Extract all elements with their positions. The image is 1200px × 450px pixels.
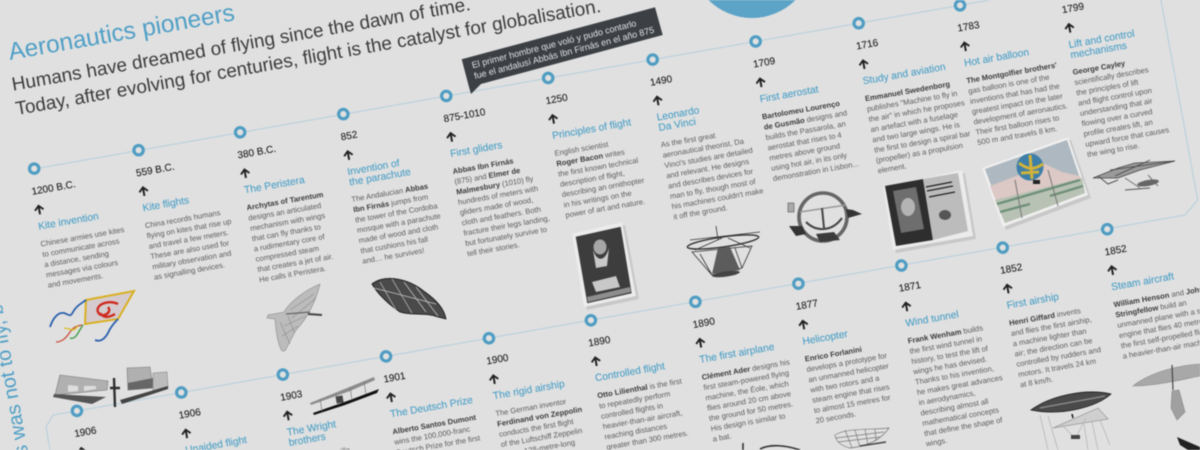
entry: Steam aircraft [1103, 230, 1200, 361]
entry: Invention of the parachute: and… he survives! [362, 246, 425, 266]
entry: Principles of flight: 1250 [545, 92, 569, 107]
entry: Lift and control mechanisms: and flight control upon [1077, 86, 1152, 108]
entry: First airship: and flies the first airship, [1010, 315, 1092, 338]
entry: Controlled flight: Otto Lilienthal is the first [597, 376, 683, 400]
entry: The first airplane: a bat. [712, 431, 732, 444]
entry: The Peristera: 380 B.C. [237, 144, 277, 162]
icon: Giffard airship [1031, 392, 1111, 450]
entry: Leonardo Da Vinci: Da Vinci [658, 117, 697, 134]
entry: Helicopter: steam engine that rises [811, 382, 890, 405]
entry: Leonardo Da Vinci: Leonardo [656, 105, 701, 124]
entry: The Peristera: that creates a jet of air. [257, 252, 334, 274]
entry: Leonardo Da Vinci: and relevant. He designs [665, 157, 750, 180]
entry: Hot air balloon: greatest impact on the later [971, 91, 1064, 116]
entry: Kite flights: China records humans [144, 208, 221, 230]
entry: Controlled flight: Controlled flight [594, 361, 666, 384]
entry: Hot air balloon: development of aeronautics. [973, 101, 1068, 127]
entry: Principles of flight: describing an ornithopter [561, 176, 645, 199]
entry: First airship: at 8 km/h. [1019, 375, 1054, 389]
entry: Kite flights [135, 154, 239, 282]
entry: Kite flights: 559 B.C. [135, 162, 175, 179]
entry: Helicopter: an unmanned helicopter [808, 361, 890, 384]
entry: Principles of flight: description of flight, [559, 169, 625, 189]
entry: Kite flights: as signalling devices. [153, 260, 226, 282]
entry: Lift and control mechanisms: Lift and control [1068, 29, 1136, 51]
entry: Controlled flight: controlled flights in [600, 401, 664, 421]
entry: Lift and control mechanisms: the principles of lift [1076, 78, 1140, 97]
entry: First gliders: fracture their legs landing, [463, 214, 550, 238]
entry: Principles of flight: Principles of flight [551, 117, 632, 142]
entry: Controlled flight: reaching distances [604, 421, 668, 441]
entry: The Peristera: that can fly thanks to [251, 222, 321, 243]
entry: Helicopter [794, 288, 897, 426]
entry: Kite invention [30, 172, 132, 290]
entry: First gliders: but fortunately survive to [465, 225, 548, 248]
entry: Wind tunnel: describing almost all [920, 397, 989, 418]
entry: Principles of flight: Roger Bacon writes [556, 147, 626, 168]
entry: The rigid airship: The German inventor [495, 397, 567, 418]
entry: Kite invention: to communicate across [42, 236, 120, 259]
icon: glider wing [372, 278, 446, 319]
entry: The first airplane: flies around 20 cm above [706, 389, 792, 413]
entry: Wind tunnel [897, 269, 1013, 449]
entry: Hot air balloon: 500 m and travels 8 km. [977, 124, 1058, 147]
entry: First airship: a machine lighter than [1012, 326, 1087, 348]
entry: Helicopter: Helicopter [802, 329, 849, 348]
entry: Principles of flight [544, 82, 649, 220]
entry: Wind tunnel: the first wind tunnel in [909, 334, 983, 356]
entry: Invention of the parachute: that cushions his fall [360, 235, 429, 255]
entry: Controlled flight: 1890 [588, 335, 612, 349]
entry: Invention of the parachute: mosque with a parachute [356, 211, 441, 235]
entry: Invention of the parachute: 852 [340, 130, 359, 143]
entry: Study and aviation: the first to design a spiral bar [873, 129, 971, 155]
entry: First gliders: gliders made of wood, [459, 195, 534, 217]
entry: The Deutsch Prize: 1901 [383, 371, 407, 386]
entry: Study and aviation: Study and aviation [862, 62, 946, 87]
entry: The rigid airship: Ferdinand von Zeppolin [496, 405, 583, 429]
entry: First aerostat: Bartolomeu Lourenço [761, 99, 841, 121]
entry: First aerostat: metres above ground [769, 141, 841, 163]
picture: Montgolfier balloon [982, 137, 1091, 230]
entry: Study and aviation: an artefact with a fuselage [870, 110, 959, 134]
entry: Kite invention: Chinese armies use kites [40, 225, 125, 249]
entry: The Peristera: mechanism with wings [249, 211, 326, 233]
entry: First airship: First airship [1006, 292, 1060, 312]
entry: Study and aviation: and two large wings. He is [872, 120, 961, 144]
entry: Study and aviation: Emmanuel Swedenborg [864, 79, 951, 103]
title: Aeronautics pioneers [6, 0, 237, 66]
entry: The Peristera: compressed steam [255, 244, 320, 264]
entry: Kite flights: Kite flights [142, 195, 190, 214]
entry: Invention of the parachute: the parachute [348, 167, 412, 189]
icon: Forlanini helicopter [835, 428, 889, 448]
icon: Da Vinci helicopter [687, 226, 760, 279]
entry: The Deutsch Prize [381, 360, 482, 450]
entry: Wind tunnel: Frank Wenham builds [907, 323, 984, 345]
entry: Hot air balloon: The Montgolfier brothers' [966, 61, 1058, 85]
entry: First aerostat: First aerostat [759, 84, 820, 105]
entry: The rigid airship: The rigid airship [492, 379, 566, 402]
entry: The rigid airship: 1900 [486, 353, 510, 367]
entry: The first airplane [691, 305, 801, 444]
entry: Lift and control mechanisms: upward force that causes [1085, 125, 1170, 149]
entry: Hot air balloon [956, 7, 1072, 147]
entry: First aerostat: builds the Passarola, an [765, 119, 846, 142]
entry: Wind tunnel: history, to test the lift of [911, 344, 989, 366]
entry: First gliders: cloth and feathers. Both [461, 205, 542, 227]
entry: First airship: Henri Giffard invents [1008, 306, 1082, 328]
entry: 1906 first [73, 425, 101, 450]
entry: Helicopter: 1877 [795, 298, 819, 313]
entry: Lift and control mechanisms: the wing to rise. [1086, 141, 1140, 159]
entry: Helicopter: Enrico Forlanini [804, 345, 863, 364]
entry: Kite invention: Kite invention [37, 211, 100, 233]
entry: Principles of flight: the first known technical [557, 156, 639, 179]
icon: Passarola aerostat [788, 193, 862, 242]
entry: Controlled flight: heavier-than-air aircraft, [602, 408, 683, 431]
decorative circle [690, 0, 814, 18]
entry: First aerostat [752, 45, 859, 183]
entry: Invention of the parachute: made of wood and cloth [358, 222, 439, 245]
entry: Helicopter: 20 seconds. [815, 409, 857, 425]
entry: The Wright brothers: 1903 [279, 389, 304, 404]
entry: Lift and control mechanisms: understanding that air [1079, 96, 1154, 118]
entry: Wind tunnel: mathematical concepts [922, 405, 1000, 428]
entry: Kite flights: military observation and [151, 249, 232, 271]
entry: The first airplane: His design is similar to [710, 411, 786, 433]
entry: Study and aviation [855, 25, 975, 175]
entry: The Peristera: Archytas of Tarentum [246, 190, 324, 212]
entry: Lift and control mechanisms: profile creates lift, an [1083, 117, 1153, 139]
entry: The Peristera: The Peristera [243, 175, 306, 196]
entry: Lift and control mechanisms: scientifically describes [1074, 65, 1149, 87]
entry: Wind tunnel: 1871 [898, 280, 922, 295]
entry: Lift and control mechanisms: mechanisms [1070, 41, 1128, 61]
entry: The Peristera: designs an articulated [248, 201, 322, 223]
entry: Leonardo Da Vinci: man to fly, though most of [669, 177, 757, 201]
icon: peristera [267, 284, 322, 351]
entry: First airship: motors. It travels 24 km [1017, 357, 1097, 379]
entry: Helicopter: develops a prototype for [806, 351, 888, 374]
entry: Wind tunnel: wings. [924, 436, 948, 449]
entry: Leonardo Da Vinci [649, 62, 766, 222]
entry: Lift and control mechanisms: 1799 [1061, 1, 1085, 16]
entry: First gliders: 875-1010 [443, 107, 487, 125]
entry: Invention of the parachute: the tower of the Cordoba [354, 201, 439, 225]
entry: Study and aviation: 1716 [855, 38, 880, 52]
entry: Wind tunnel: that define the shape of [923, 415, 1004, 438]
entry: Wind tunnel: in aerodynamics, [918, 388, 976, 407]
entry: First airship: 1852 [999, 262, 1024, 277]
entry: Controlled flight: to repeatedly perform [598, 389, 671, 411]
entry: The first airplane: Clément Ader designs his [701, 357, 791, 382]
entry: The rigid airship: conducts the first flight [498, 417, 575, 439]
entry: Leonardo Da Vinci: Vinci's studies are detailed [664, 146, 753, 170]
entry: The Deutsch Prize: The Deutsch Prize [389, 395, 474, 420]
entry: The first airplane: first steam-powered flying [703, 368, 790, 392]
entry: Hot air balloon: inventions that has had the [969, 81, 1060, 106]
entry: Leonardo Da Vinci: aeronautical theorist, Da [662, 136, 745, 160]
icon: Ader bat plane [743, 443, 800, 450]
entry: First gliders: (875) and Elmer de [454, 166, 521, 186]
entry: Principles of flight: power of art and nature. [565, 197, 646, 220]
entry: Kite invention: messages via colours [45, 258, 119, 280]
entry: The Wright brothers: brothers [288, 432, 327, 449]
entry: The first airplane: the ground for 50 metres. [708, 399, 794, 423]
icon: Henson steam aircraft [1133, 364, 1200, 450]
entry: Hot air balloon: Their first balloon rises to [975, 113, 1060, 137]
icon: Santos-Dumont 14-bis [53, 367, 168, 407]
entry: Unaided flight: 1906 [178, 407, 202, 422]
entry: The Deutsch Prize: Alberto Santos Dumont [392, 413, 477, 436]
entry: First aerostat: 1709 [752, 56, 777, 71]
entry: Helicopter: with two rotors and a [808, 373, 881, 395]
entry: Invention of the parachute: Invention of [347, 158, 401, 178]
entry: Kite flights: These are also used for [150, 238, 230, 261]
icon: Cayley glider [1093, 160, 1175, 190]
icon: kite [50, 291, 134, 342]
entry: Invention of the parachute: Ibn Firnás jumps from [353, 192, 429, 214]
entry: Leonardo Da Vinci: 1490 [649, 74, 674, 89]
entry: Invention of the parachute: The Andalucian Abbas [351, 182, 429, 204]
entry: First gliders: hundreds of meters with [457, 184, 539, 207]
entry: Lift and control mechanisms: George Cayley [1072, 59, 1127, 77]
entry: First airship: controlled by rudders and [1016, 345, 1102, 369]
entry: Helicopter: to almost 15 metres for [813, 393, 892, 415]
entry: Wind tunnel: wings he has devised. [911, 355, 988, 377]
entry: First gliders [442, 99, 554, 258]
entry: Controlled flight [587, 324, 692, 450]
entry: The Deutsch Prize: wins the 100,000-franc [393, 424, 471, 447]
entry: Hot air balloon: gas balloon is one of the [967, 73, 1050, 96]
entry: Kite flights: flying on kites that rise up [146, 217, 232, 241]
callout label: fue el andalusí Abbás Ibn Firnás en el año 875 [473, 25, 655, 81]
entry: Study and aviation: the air" in which he proposes [868, 98, 965, 124]
callout label [462, 7, 663, 94]
entry: Hot air balloon: Hot air balloon [963, 47, 1030, 69]
entry: The Peristera: a rudimentary core of [253, 232, 326, 253]
entry: First aerostat: using hot air, in its only [770, 151, 848, 173]
entry: Steam aircraft: Steam aircraft [1111, 271, 1175, 293]
entry: 1906 first: 1906 [74, 425, 98, 440]
entry: First airship: air; the direction can be [1014, 336, 1093, 359]
entry: Leonardo Da Vinci: it off the ground. [673, 203, 728, 221]
entry: The first airplane: 1890 [692, 316, 716, 331]
entry: Invention of the parachute [339, 118, 447, 266]
entry: Steam aircraft: Stringfellow build an [1115, 298, 1187, 320]
entry: The Wright brothers: The Wright [286, 419, 337, 439]
entry: The rigid airship [484, 342, 589, 450]
callout label: El primer hombre que voló y pudo contarlo [471, 18, 637, 70]
entry: First gliders: Abbas Ibn Firnás [452, 156, 514, 176]
entry: Study and aviation: (propeller) as a propulsion [875, 141, 964, 165]
entry: Kite invention: and movements. [47, 271, 104, 290]
entry: The rigid airship: of the Luftschiff Zeppelin [500, 426, 583, 449]
entry: Principles of flight: in his writings on the [563, 189, 632, 209]
entry: Steam aircraft: 1852 [1104, 244, 1128, 258]
entry: Wind tunnel: Wind tunnel [905, 309, 960, 330]
entry: The first airplane: machine, the Éole, which [705, 379, 789, 402]
entry: First gliders: tell their stories. [466, 240, 520, 258]
entry: Principles of flight: English scientist [554, 139, 610, 158]
entry: Kite invention: 1200 B.C. [31, 179, 77, 198]
entry: The Peristera: He calls it Peristera. [258, 264, 327, 284]
entry: First gliders: Malmesbury (1010) fly [456, 174, 534, 197]
entry: First aerostat: aerostat that rises to 4 [767, 130, 842, 152]
entry: Unaided flight [177, 400, 248, 450]
entry: Hot air balloon: 1783 [957, 20, 981, 35]
entry: Lift and control mechanisms [1060, 0, 1172, 159]
entry: The Peristera [236, 137, 337, 284]
entry: First gliders: First gliders [450, 140, 503, 160]
entry: Leonardo Da Vinci: As the first great [660, 131, 717, 149]
icon: Wright flyer [310, 377, 379, 415]
entry: First aerostat: demonstration in Lisbon... [772, 159, 859, 183]
entry: Study and aviation: publishes "Machine to fly in [866, 89, 958, 114]
entry: Wind tunnel: he makes great advances [916, 373, 1004, 397]
entry: Lift and control mechanisms: flowing over a curved [1081, 107, 1153, 128]
entry: Study and aviation: element. [877, 161, 907, 175]
picture: monk portrait [572, 222, 639, 310]
entry: Kite flights: and travel a few meters. [148, 228, 229, 251]
picture: Principia book [883, 170, 976, 253]
entry: The first airplane: The first airplane [699, 342, 776, 366]
entry: Kite invention: a distance, sending [43, 249, 109, 269]
entry: The Wright brothers [279, 383, 351, 450]
entry: Wind tunnel: Thanks to his invention, [914, 364, 994, 387]
entry: Leonardo Da Vinci: and describes devices for [667, 167, 754, 191]
entry: First aerostat: de Gusmão designs and [763, 108, 848, 132]
entry: First airship [999, 251, 1105, 389]
entry: Leonardo Da Vinci: his machines couldn't make [671, 186, 764, 211]
